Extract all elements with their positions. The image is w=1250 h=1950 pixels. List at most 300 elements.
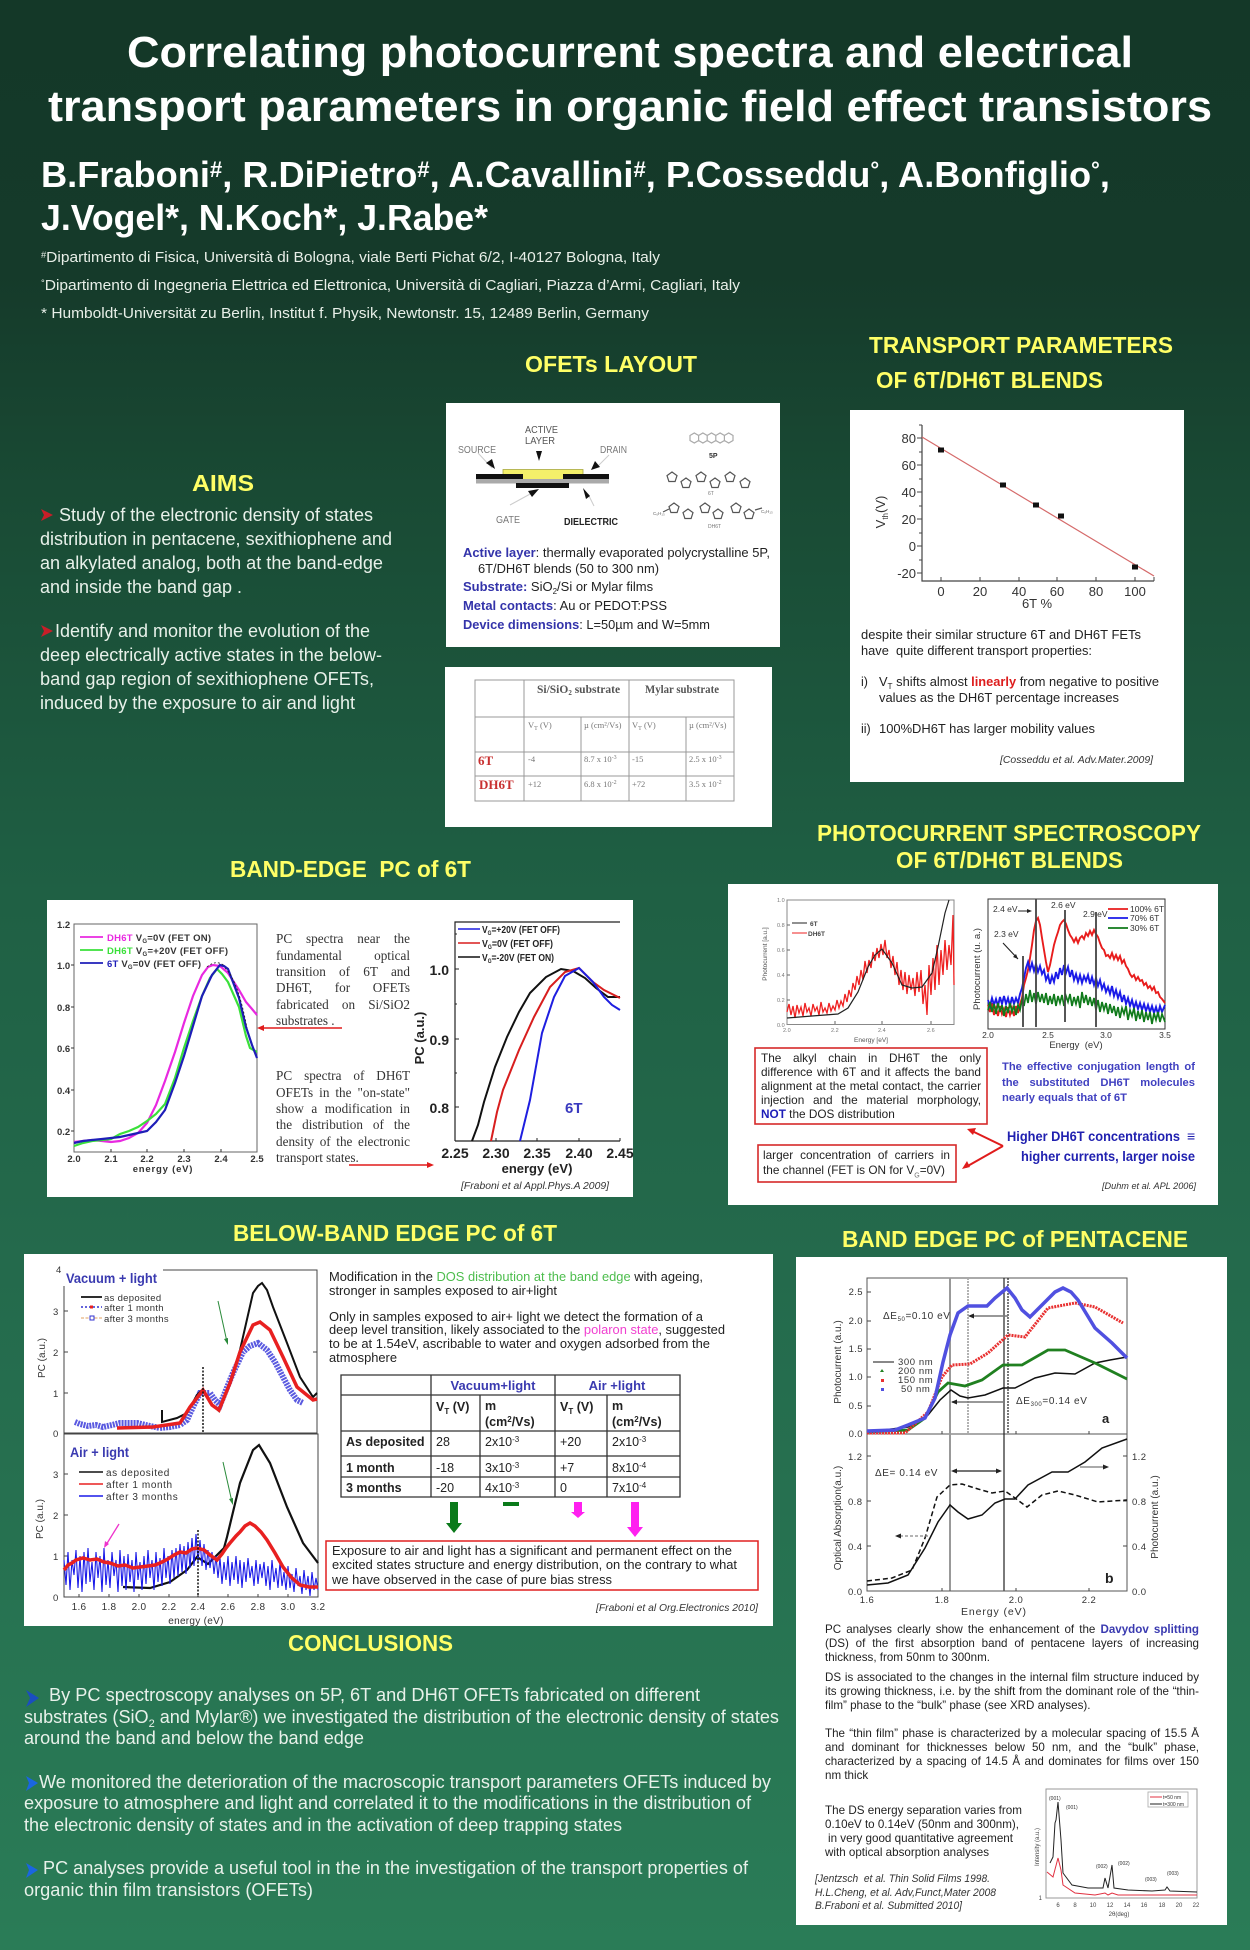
text block: Davydov splitting: thickness, from 50nm to 300nm. <box>825 1651 990 1664</box>
authors: J.Vogel*, N.Koch*, J.Rabe* <box>41 197 488 238</box>
table text: +12 <box>528 779 541 789</box>
citation: B.Fraboni et al. Submitted 2010] <box>815 1900 963 1912</box>
legend: V <box>482 938 489 950</box>
table text: (V) <box>642 720 656 730</box>
scatter chart: threshold voltage vs 6T percent: (V) <box>873 496 888 513</box>
legend: =0V (FET ON) <box>147 933 211 944</box>
table text: 3.5 x 10 <box>689 779 717 789</box>
heading: band-edge PC of 6T: BAND-EDGE PC of 6T <box>230 856 472 882</box>
scatter chart: threshold voltage vs 6T percent: 100 <box>1124 584 1146 599</box>
authors: , <box>1100 154 1110 195</box>
table: ageing parameters: (cm <box>612 1415 634 1429</box>
line chart: XRD intensity: 12 <box>1107 1903 1114 1909</box>
text block: transport properties <box>861 628 1159 736</box>
arrow: large magenta down <box>627 1502 643 1537</box>
line chart: air + light: PC (a.u.) <box>35 1499 46 1539</box>
text block: transport properties: despite their similar structure 6T and DH6T FETs <box>861 628 1141 642</box>
text block: aim two: band gap region of sexithiophene OFETs, <box>40 669 374 689</box>
line chart: PC spectra left: 0.8 <box>57 1003 70 1014</box>
legend: DH6T <box>808 931 825 938</box>
text block: aim two: induced by the exposure to air and light <box>40 693 355 713</box>
text block: DS energy separation: The DS energy separation varies from <box>825 1803 1022 1817</box>
table: ageing parameters: 2 <box>634 1415 639 1424</box>
table: ageing parameters: (cm <box>485 1415 507 1429</box>
table: ageing parameters: 2x10 <box>485 1435 512 1449</box>
callout: alkyl chain: alignment at the metal contact, the carrier <box>761 1079 981 1093</box>
authors: , A.Bonfiglio <box>879 154 1091 195</box>
scatter chart: threshold voltage vs 6T percent: 20 <box>902 512 916 527</box>
diagram: molecules: DH6T <box>708 524 721 530</box>
line chart: a photocurrent vs energy: =0.10 eV <box>905 1311 951 1322</box>
legend: G <box>488 945 492 951</box>
text block: PC spectra in on-state: OFETs in the "on-state" <box>276 1085 410 1100</box>
line chart: photocurrent blends: Photocurrent (u. a.) <box>972 928 983 1010</box>
panel: below-band edge PC of 6T <box>24 1254 773 1627</box>
legend: =0V (FET OFF) <box>133 959 201 970</box>
line chart: photocurrent 6T and DH6T: 2.6 <box>927 1028 935 1034</box>
table text: 6T <box>478 753 494 768</box>
heading: photocurrent spectroscopy <box>817 820 1201 873</box>
line chart: photocurrent blends: 100% 6T <box>1130 904 1164 914</box>
legend: G <box>128 965 133 971</box>
line chart: PC spectra right: 2.25 <box>441 1145 469 1161</box>
line chart: photocurrent 6T and DH6T: 2.0 <box>783 1028 791 1034</box>
line chart: XRD intensity: 8 <box>1073 1903 1077 1909</box>
table text: -3 <box>612 755 617 761</box>
line chart: photocurrent 6T and DH6T: 0.6 <box>777 948 785 954</box>
line chart: vacuum + light: PC (a.u.) <box>37 1338 48 1378</box>
line chart: photocurrent blends: 2.4 eV <box>993 904 1018 914</box>
heading: transport parameters: OF 6T/DH6T BLENDS <box>876 367 1103 393</box>
line chart: a photocurrent vs energy: 2.5 <box>849 1287 863 1298</box>
line chart: XRD intensity: t=50 nm <box>1163 1795 1181 1801</box>
text block: thin film phase: nm thick <box>825 1769 868 1782</box>
table text: 2 <box>568 689 572 697</box>
text block: aim one: and inside the band gap . <box>40 577 242 597</box>
line chart: air + light: 3.0 <box>281 1602 296 1613</box>
text block: transport properties: V <box>879 675 887 689</box>
table text: µ (cm²/Vs) <box>584 720 622 730</box>
line chart: photocurrent 6T and DH6T: Photocurrent [a.u.] <box>762 927 769 981</box>
line chart: vacuum + light: Vacuum + light <box>66 1271 157 1286</box>
heading: OFETs layout: OFETs LAYOUT <box>525 351 698 377</box>
title: Correlating photocurrent spectra and electrical <box>127 28 1133 77</box>
legend: after 3 months <box>104 1314 169 1325</box>
title <box>48 28 1212 131</box>
scatter chart: threshold voltage vs 6T percent: 20 <box>973 584 987 599</box>
text block: conclusion one: substrates (SiO <box>24 1707 148 1727</box>
authors: B.Fraboni <box>41 154 209 195</box>
text block: Davydov splitting: PC analyses clearly show the enhancement of the Davydov splitting <box>825 1623 1199 1636</box>
affiliations: ° <box>41 278 45 288</box>
line chart: b optical absorption vs energy: b <box>1105 1570 1114 1586</box>
text block: DS energy separation: 0.10eV to 0.14eV (50nm and 300nm), <box>825 1817 1019 1831</box>
scatter chart: threshold voltage vs 6T percent: 60 <box>1050 584 1064 599</box>
line chart: air + light: 2.0 <box>132 1602 147 1613</box>
legend: DH6T V <box>107 933 142 944</box>
citation: [Fraboni et al Appl.Phys.A 2009] <box>460 1180 610 1192</box>
line chart: air + light: Air + light <box>70 1445 129 1460</box>
table text: -3 <box>717 755 722 761</box>
line chart: PC spectra left: 0.6 <box>57 1044 70 1055</box>
heading: transport parameters: TRANSPORT PARAMETERS <box>869 332 1173 358</box>
text block: thin film phase <box>825 1727 1199 1785</box>
scatter chart: threshold voltage vs 6T percent: 40 <box>1012 584 1026 599</box>
line chart: XRD intensity: 20 <box>1176 1903 1183 1909</box>
text block: DS association: its growing thickness, i.e. by the shift from the dominant role of the “thin- <box>825 1685 1199 1698</box>
table: ageing parameters: 4x10 <box>485 1481 512 1495</box>
text block: DOS modification <box>329 1270 725 1365</box>
text block: aim two: deep electrically active states in the below- <box>40 645 382 665</box>
diagram: molecules <box>653 433 773 530</box>
line chart: PC spectra left <box>57 920 264 1175</box>
diagram: device cross-section: SOURCE <box>458 444 496 456</box>
authors: ° <box>1091 157 1100 182</box>
text block: conclusion two <box>24 1772 771 1835</box>
panel: photocurrent spectroscopy <box>728 884 1218 1205</box>
text block: PC spectra in on-state: density of the electronic <box>276 1134 410 1149</box>
text block: transport properties: values as the DH6T percentage increases <box>879 691 1119 705</box>
line chart: photocurrent blends: 3.5 <box>1159 1030 1171 1040</box>
callout: larger concentration of carriers: the channel (FET is ON for VG=0V) <box>763 1163 945 1180</box>
legend <box>81 1293 169 1325</box>
callout: exposure conclusion: Exposure to air and light has a significant and permanent effect on the <box>332 1543 732 1558</box>
line chart: photocurrent blends: 30% 6T <box>1130 923 1159 933</box>
line chart: photocurrent 6T and DH6T: 0.2 <box>777 998 785 1004</box>
text block: device description: /Si or Mylar films <box>557 579 654 594</box>
line chart: PC spectra right: energy (eV) <box>502 1161 572 1176</box>
text block: PC spectra near fundamental transition <box>276 931 410 1031</box>
table text: -15 <box>632 754 643 764</box>
line chart: PC spectra left: 0.2 <box>57 1127 70 1138</box>
legend: 6T V <box>107 959 128 970</box>
scatter chart: threshold voltage vs 6T percent: V <box>873 520 888 528</box>
line chart: XRD intensity: 6 <box>1056 1903 1060 1909</box>
line chart: photocurrent 6T and DH6T: 2.4 <box>878 1028 886 1034</box>
line chart: air + light: 2.4 <box>191 1602 206 1613</box>
text block: PC spectra near fundamental transition: PC spectra near the <box>276 931 410 946</box>
line chart: a photocurrent vs energy: 0.0 <box>849 1429 863 1440</box>
callout: alkyl chain: injection and the material morphology, <box>761 1093 981 1107</box>
text block: conclusion two: the electronic density of states and in the activation of deep trapping states <box>24 1815 622 1835</box>
scatter chart: threshold voltage vs 6T percent: th <box>881 513 890 520</box>
authors: , P.Cosseddu <box>646 154 870 195</box>
line chart: photocurrent blends: 2.9 eV <box>1083 909 1108 919</box>
table: ageing parameters: -3 <box>512 1481 520 1490</box>
line chart: a photocurrent vs energy: 1.0 <box>849 1372 863 1383</box>
legend: 300 nm <box>898 1357 933 1368</box>
text block: DOS modification: atmosphere <box>329 1351 397 1365</box>
text block: transport properties: ii) <box>861 722 871 736</box>
line chart: b optical absorption vs energy <box>833 1434 1161 1618</box>
line chart: PC spectra right: 2.45 <box>606 1145 634 1161</box>
line chart: air + light: 1.8 <box>102 1602 117 1613</box>
text block: PC spectra in on-state: the distribution of the <box>276 1117 410 1132</box>
line chart: air + light: 2.8 <box>251 1602 266 1613</box>
diagram: device cross-section: LAYER <box>525 435 555 447</box>
scatter chart: threshold voltage vs 6T percent: 6T % <box>1022 596 1052 611</box>
line chart: XRD intensity <box>1035 1789 1200 1918</box>
line chart: a photocurrent vs energy: 1.5 <box>849 1344 863 1355</box>
line chart: b optical absorption vs energy: 0.8 <box>1132 1497 1146 1508</box>
legend: =+20V (FET OFF) <box>147 946 228 957</box>
line chart: XRD intensity: 16 <box>1141 1903 1148 1909</box>
text block: DOS modification: Only in samples exposed to air+ light we detect the formation of a <box>329 1310 703 1324</box>
line chart: air + light: 0 <box>53 1593 58 1604</box>
diagram: device cross-section: DRAIN <box>600 444 627 456</box>
table text <box>478 684 727 792</box>
line chart: PC spectra left: 2.0 <box>67 1154 81 1165</box>
table text: V <box>632 720 638 730</box>
text block: PC spectra near fundamental transition: DH6T, for OFETs <box>276 980 410 995</box>
authors: # <box>417 157 430 182</box>
line chart: PC spectra left: 2.1 <box>104 1154 118 1165</box>
text block: DS association: DS is associated to the changes in the internal film structure induced by <box>825 1671 1199 1684</box>
affiliations: # <box>41 250 46 260</box>
legend <box>792 921 825 938</box>
line chart: vacuum + light: 0 <box>53 1429 58 1440</box>
diagram: molecules: 6T <box>708 491 714 497</box>
table: ageing parameters: 2x10 <box>612 1435 639 1449</box>
line chart: air + light: 3.2 <box>311 1602 326 1613</box>
table: ageing parameters: -18 <box>436 1461 454 1475</box>
text block: higher concentrations: ≡ <box>1187 1128 1195 1144</box>
table: ageing parameters: Air +light <box>589 1378 646 1393</box>
text block: conclusion one: By PC spectroscopy analyses on 5P, 6T and DH6T OFETs fabricated on different <box>49 1685 700 1705</box>
text block: thin film phase: and dominant for thicknesses below 50 nm, and the “bulk” phase, <box>825 1741 1199 1754</box>
legend: G <box>488 959 492 965</box>
table: ageing parameters: 8x10 <box>612 1461 639 1475</box>
text block: conjugation length: nearly equals that of 6T <box>1002 1092 1127 1104</box>
text block: aim two <box>40 621 382 713</box>
heading: transport parameters <box>869 332 1173 393</box>
line chart: XRD intensity: 22 <box>1193 1903 1200 1909</box>
callout: alkyl chain: NOT the DOS distribution <box>761 1107 895 1121</box>
text block: conjugation length <box>1002 1060 1195 1108</box>
heading: photocurrent spectroscopy: PHOTOCURRENT SPECTROSCOPY <box>817 820 1201 846</box>
line chart: a photocurrent vs energy: Photocurrent (a.u.) <box>833 1320 844 1404</box>
citation: [Fraboni et al Org.Electronics 2010] <box>595 1602 759 1614</box>
table: ageing parameters: V <box>560 1400 568 1414</box>
legend: =-20V (FET ON) <box>492 952 554 964</box>
line chart: a photocurrent vs energy <box>833 1278 1127 1591</box>
text block: aim one: Study of the electronic density of states <box>59 505 373 525</box>
legend: after 3 months <box>106 1492 178 1503</box>
table text: 2.5 x 10 <box>689 754 717 764</box>
line chart: PC spectra left: 2.4 <box>214 1154 228 1165</box>
panel: transport parameters <box>850 410 1184 782</box>
table text: DH6T <box>479 777 514 792</box>
table: ageing parameters: 3 months <box>346 1481 402 1495</box>
line chart: PC spectra left: 2.3 <box>177 1154 191 1165</box>
legend: G <box>142 939 147 945</box>
callout: alkyl chain <box>755 1048 987 1124</box>
text block: conclusion two: We monitored the deterioration of the macroscopic transport parameters OFETs induced by <box>39 1772 771 1792</box>
text block: conjugation length: The effective conjugation length of <box>1002 1061 1195 1073</box>
table text: Mylar substrate <box>645 684 719 696</box>
table: ageing parameters: m <box>612 1399 623 1413</box>
legend: V <box>482 924 489 936</box>
text block: transport properties: 100%DH6T has larger mobility values <box>879 722 1095 736</box>
text block: PC spectra near fundamental transition: transition of 6T and <box>276 964 410 979</box>
text block: transport properties: shifts almost <box>893 675 971 689</box>
line chart: XRD intensity: 1 <box>1039 1896 1043 1902</box>
line chart: b optical absorption vs energy: 2.2 <box>1082 1595 1096 1606</box>
diagram: device cross-section <box>458 424 627 528</box>
text block: thin film phase: characterized by a spacing of 14.5 Å and dominates for films over 150 <box>825 1755 1199 1768</box>
text block: DOS modification: deep level transition, likely associated to the polaron state, suggested <box>329 1323 725 1337</box>
text block: aim one <box>40 505 392 597</box>
table: ageing parameters: 7x10 <box>612 1481 639 1495</box>
line chart: air + light <box>35 1434 326 1627</box>
line chart: b optical absorption vs energy: 0.0 <box>1132 1587 1146 1598</box>
diagram: molecules: C₆H₁₃ <box>761 509 773 514</box>
text block: transport properties: have quite different transport properties: <box>861 644 1092 658</box>
line chart: PC spectra left: 1.2 <box>57 920 70 931</box>
arrow: to right chart <box>349 1162 434 1168</box>
heading: conclusions: CONCLUSIONS <box>288 1630 453 1656</box>
heading: band edge PC of pentacene: BAND EDGE PC of PENTACENE <box>842 1226 1188 1252</box>
line chart: photocurrent 6T and DH6T: 0.0 <box>777 1023 785 1029</box>
line chart: XRD intensity: (001) <box>1049 1796 1061 1802</box>
line chart: photocurrent blends <box>972 899 1171 1051</box>
text block: DS energy separation <box>824 1803 1022 1859</box>
text block: higher concentrations <box>1007 1128 1195 1164</box>
text block: Davydov splitting <box>825 1623 1199 1667</box>
panel: band-edge PC of 6T <box>47 900 634 1197</box>
text block: transport properties: T <box>888 682 893 691</box>
legend: =0V (FET OFF) <box>492 938 553 950</box>
table: ageing parameters: Vacuum+light <box>451 1378 536 1393</box>
table: ageing parameters: T <box>444 1407 449 1416</box>
line chart: XRD intensity: (002) <box>1096 1864 1108 1870</box>
line chart: b optical absorption vs energy: 0.4 <box>1132 1542 1146 1553</box>
table: ageing parameters: -3 <box>512 1435 520 1444</box>
scatter chart: threshold voltage vs 6T percent: 40 <box>902 485 916 500</box>
legend: after 1 month <box>106 1480 173 1491</box>
authors: , A.Cavallini <box>430 154 633 195</box>
line chart: PC spectra left: energy (eV) <box>133 1164 193 1175</box>
callout: exposure conclusion <box>326 1541 758 1590</box>
affiliations: Dipartimento di Ingegneria Elettrica ed Elettronica, Università di Cagliari, Piazza d’Armi, Cagliari, Italy <box>45 277 741 294</box>
table: ageing parameters: (V) <box>449 1400 469 1414</box>
table text: -2 <box>612 780 617 786</box>
line chart: a photocurrent vs energy: 50 <box>898 1317 905 1323</box>
legend: V <box>482 952 489 964</box>
line chart: PC spectra right: PC (a.u.) <box>412 1012 427 1064</box>
affiliations <box>41 249 741 322</box>
table: ageing parameters: m <box>485 1399 496 1413</box>
line chart: b optical absorption vs energy: 1.6 <box>860 1595 874 1606</box>
line chart: b optical absorption vs energy: 0.4 <box>848 1542 862 1553</box>
authors: # <box>210 157 222 182</box>
line chart: photocurrent blends: 3.0 <box>1100 1030 1112 1040</box>
line chart: vacuum + light: 4 <box>56 1265 61 1276</box>
authors: # <box>633 157 646 182</box>
diagram: molecules: C₆H₁₃ <box>653 511 665 516</box>
legend: G <box>143 952 148 958</box>
line chart: air + light: energy (eV) <box>168 1616 224 1627</box>
icon: red bullet <box>41 509 53 521</box>
line chart: PC spectra right: 2.35 <box>523 1145 551 1161</box>
authors: , R.DiPietro <box>222 154 417 195</box>
text block: conjugation length: the substituted DH6T molecules <box>1002 1077 1195 1089</box>
text block: DOS modification: Modification in the DOS distribution at the band edge with ageing, <box>329 1270 703 1284</box>
line chart: photocurrent blends: 2.0 <box>982 1030 994 1040</box>
icon: red bullet <box>41 625 53 637</box>
text block: DS energy separation: with optical absorption analyses <box>824 1845 989 1859</box>
table text: T <box>534 726 538 732</box>
table text: (V) <box>538 720 552 730</box>
scatter chart: threshold voltage vs 6T percent: 0 <box>909 539 916 554</box>
text block: device description <box>463 545 770 632</box>
text block: higher concentrations: Higher DH6T concentrations <box>1007 1128 1180 1144</box>
table: ageing parameters: 28 <box>436 1435 450 1449</box>
heading: aims: AIMS <box>192 470 254 496</box>
line chart: photocurrent 6T and DH6T: 0.4 <box>777 973 785 979</box>
text block: aim two: Identify and monitor the evolution of the <box>55 621 370 641</box>
legend <box>80 933 228 971</box>
legend: after 1 month <box>104 1303 164 1314</box>
text block: conclusion one: 2 <box>149 1718 155 1730</box>
text block: device description: Substrate: SiO <box>463 579 553 594</box>
line chart: photocurrent 6T and DH6T: 1.0 <box>777 898 785 904</box>
panel: substrate comparison table <box>445 667 772 827</box>
text block: device description: 6T/DH6T blends (50 to 300 nm) <box>478 561 659 576</box>
legend <box>873 1357 933 1395</box>
line chart: a photocurrent vs energy: ΔE <box>1016 1396 1031 1407</box>
text block: DS energy separation: in very good quantitative agreement <box>828 1831 1014 1845</box>
panel: band edge PC of pentacene <box>796 1257 1227 1925</box>
diagram: device cross-section: GATE <box>496 514 520 526</box>
line chart: XRD intensity: Intensity (a.u.) <box>1035 1828 1041 1866</box>
icon: blue bullet <box>26 1863 38 1878</box>
table text: 8.7 x 10 <box>584 754 612 764</box>
table: ageing parameters: As deposited <box>346 1435 424 1449</box>
table: ageing parameters: /Vs) <box>512 1415 535 1429</box>
callout: exposure conclusion: we have observed in the case of pure bias stress <box>331 1572 612 1587</box>
line chart: PC spectra left: 0.4 <box>57 1086 71 1097</box>
text block: aim one: distribution in pentacene, sexithiophene and <box>40 529 392 549</box>
line chart: XRD intensity: (002) <box>1118 1861 1130 1867</box>
authors: ° <box>870 157 879 182</box>
table: ageing parameters: /Vs) <box>639 1415 662 1429</box>
line chart: PC spectra right: 0.8 <box>430 1100 449 1116</box>
text block: transport properties: linearly from negative to positive <box>971 675 1155 689</box>
line chart: XRD intensity: t=300 nm <box>1163 1802 1184 1808</box>
table: ageing parameters <box>341 1375 680 1497</box>
diagram: device cross-section: DIELECTRIC <box>564 516 618 528</box>
table: ageing parameters: 3x10 <box>485 1461 512 1475</box>
text block: DOS modification: stronger in samples exposed to air+light <box>329 1284 558 1298</box>
icon: blue bullet <box>26 1776 38 1791</box>
citation: [Jentzsch et al. Thin Solid Films 1998. <box>814 1873 990 1885</box>
line chart: PC spectra left: 2.5 <box>250 1154 264 1165</box>
line chart: a photocurrent vs energy: 300 <box>1031 1402 1042 1408</box>
text block: conclusion one: around the band and below the band edge <box>24 1728 364 1748</box>
line chart: a photocurrent vs energy: =0.14 eV <box>1042 1396 1088 1407</box>
scatter chart: threshold voltage vs 6T percent: 80 <box>1089 584 1103 599</box>
line chart: b optical absorption vs energy: Photocurrent (a.u.) <box>1150 1475 1161 1559</box>
legend <box>79 1468 178 1503</box>
legend: 150 nm <box>898 1375 933 1386</box>
line chart: vacuum + light: 1 <box>53 1389 58 1400</box>
arrow: green down <box>446 1502 462 1533</box>
text block: device description: Active layer: thermally evaporated polycrystalline 5P, <box>463 545 770 560</box>
text block: thin film phase: The “thin film” phase is characterized by a molecular spacing of 15.5 Å <box>825 1727 1199 1740</box>
line chart: photocurrent 6T and DH6T <box>762 898 954 1044</box>
text block: PC spectra in on-state: PC spectra of DH6T <box>276 1068 410 1083</box>
